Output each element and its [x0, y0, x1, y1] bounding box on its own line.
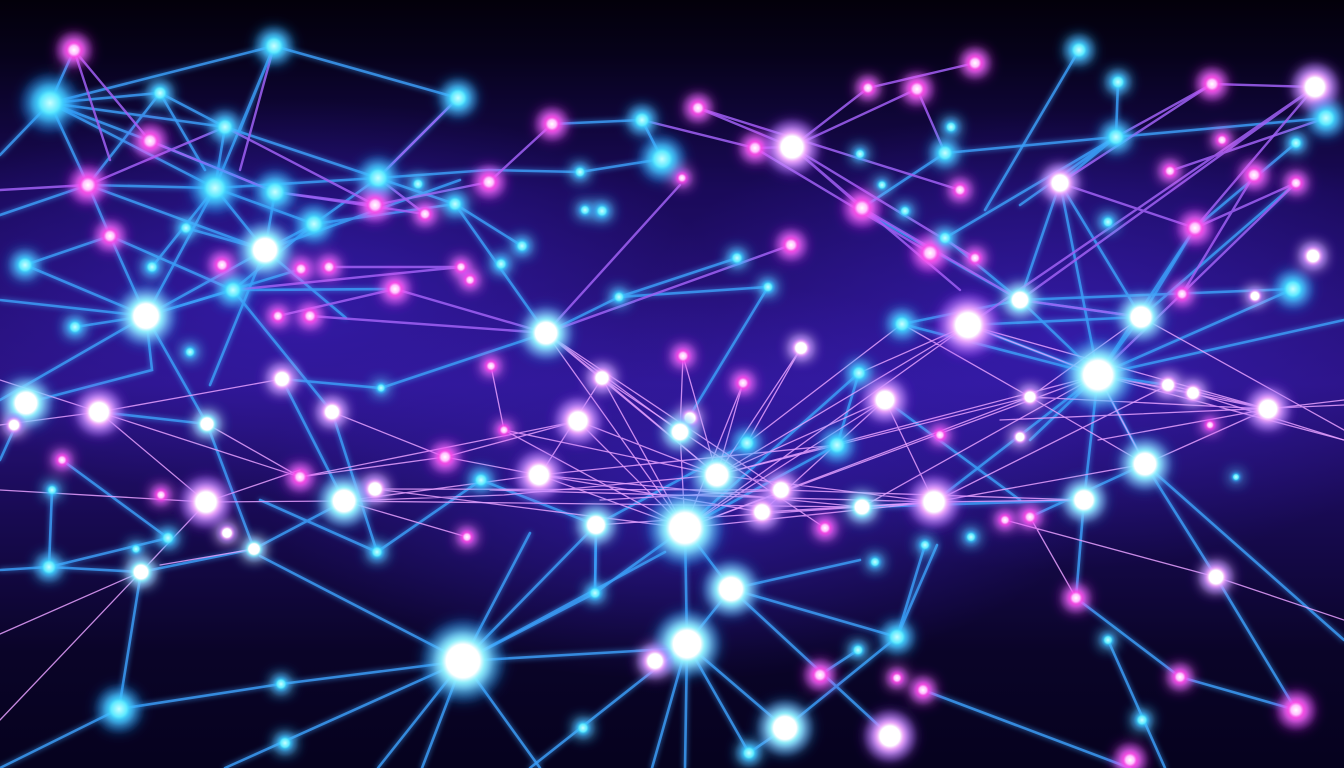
links: violet connections [0, 46, 1326, 375]
nodes: middle right cluster [864, 414, 1244, 615]
nodes: top left cluster [7, 24, 571, 363]
links: pink and lilac fine threads [0, 317, 1344, 720]
nodes: top right cluster [884, 32, 1344, 433]
nodes: top centre cluster [488, 45, 993, 361]
nodes: bottom cluster [93, 559, 1318, 768]
nodes: middle left cluster [0, 361, 480, 590]
background glow [0, 100, 1344, 680]
nodes: central cluster [466, 333, 962, 568]
